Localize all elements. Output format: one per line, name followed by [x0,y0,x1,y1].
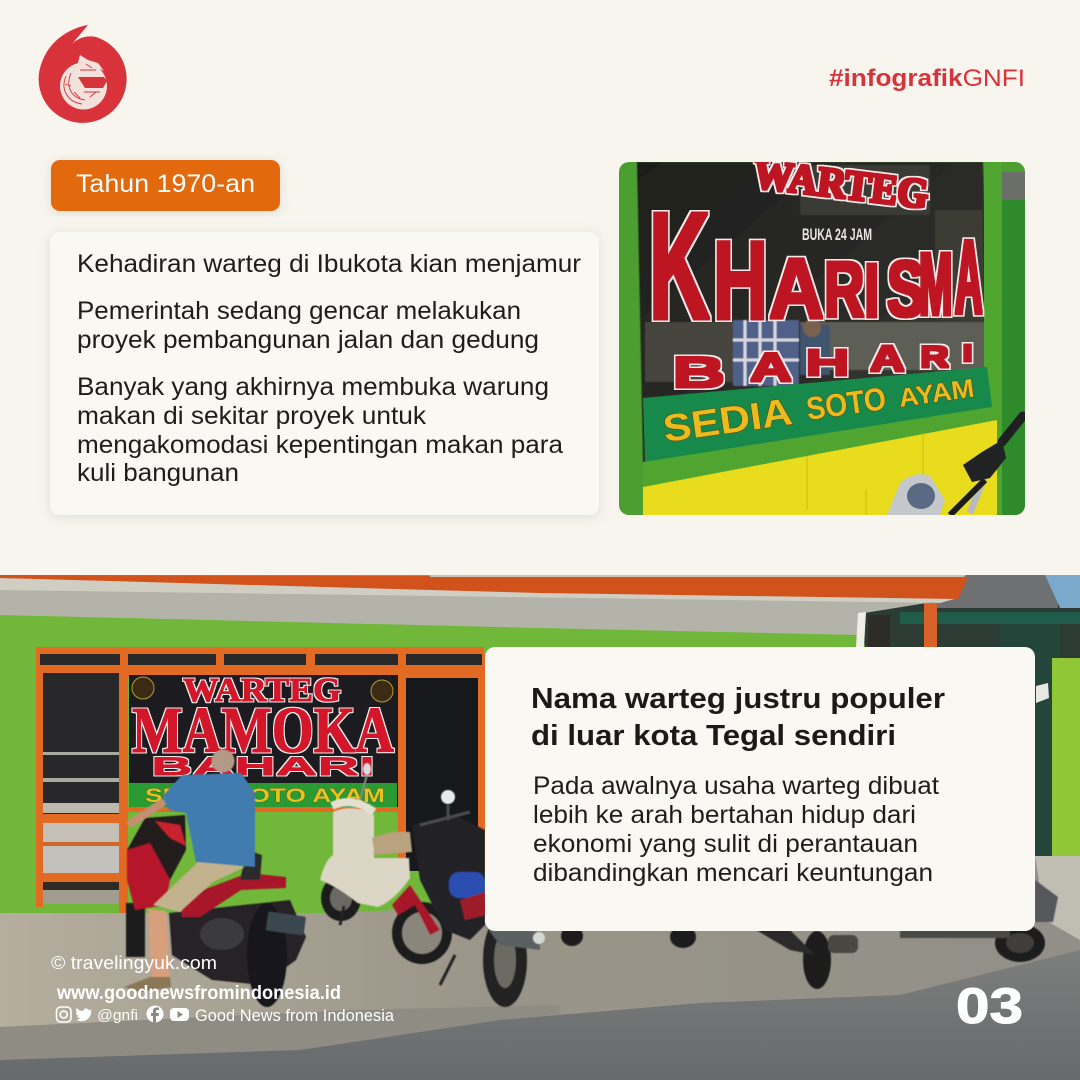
sign: BAHARI: I [962,340,973,366]
left window and cabinet [43,673,119,904]
paragraph 3 [77,373,563,487]
paragraph 3: kuli bangunan [77,459,239,487]
handle: @gnfi [97,1007,138,1024]
sign: BAHARI: A [870,339,905,379]
photo: Warteg Kharisma Bahari window [619,151,1025,515]
sign: SEDIA SOTO AYAM: SEDIA [660,391,795,451]
sign: SEDIA SOTO AYAM: SEDIA SOTO AYAM [145,786,385,807]
icon: facebook [146,1006,164,1023]
photo: Warteg Mamoka Bahari storefront [0,575,1080,1080]
panel: warteg history text [50,232,599,515]
paragraph: dibandingkan mencari keuntungan [533,859,933,887]
paragraph [533,772,939,887]
icon: instagram [56,1007,71,1022]
logo: GNFI [39,25,127,123]
white scooter [320,763,412,925]
pavement [0,856,1080,1027]
pavement edge strip [0,1005,560,1062]
sign: WARTEG: WARTEG [751,151,931,218]
orange roof edge [0,575,968,599]
motorcycle handlebar [887,416,1023,515]
sign: BAHARI: BAHARI [151,753,375,781]
sign: KHARISMA: A [955,218,982,338]
channel name: Good News from Indonesia [195,1006,395,1025]
paragraph 3: Banyak yang akhirnya membuka warung [77,373,549,401]
paragraph 2: Pemerintah sedang gencar melakukan [77,297,521,325]
sign: BAHARI: B [672,348,725,396]
sign: SEDIA SOTO AYAM: SOTO [804,380,888,427]
sign: KHARISMA [652,210,984,322]
sign badges [132,677,393,702]
lower frame [643,407,992,464]
sign board [129,675,398,807]
sign: BUKA 24 JAM: BUKA 24 JAM [802,225,872,244]
sign: BAHARI: A [750,345,792,390]
period tag: Tahun 1970-an [51,160,280,211]
sign: BAHARI [674,342,974,390]
photo credit: © travelingyuk.com [51,953,217,973]
yellow wall [643,420,997,515]
sign: MAMOKA: MAMOKA [132,694,394,767]
sign: KHARISMA: A [769,242,824,337]
sign: BAHARI: R [920,341,949,374]
door [406,678,478,871]
sign: BAHARI: H [805,342,850,383]
green wall [0,612,865,913]
paragraph 3: makan di sekitar proyek untuk [77,402,427,430]
paragraph 2: proyek pembangunan jalan dan gedung [77,326,539,354]
green soto sign band [643,367,992,462]
heading: Nama warteg justru populer [531,683,945,715]
sign: KHARISMA: S [887,243,924,333]
heading: di luar kota Tegal sendiri [531,720,896,752]
social row [56,1006,395,1025]
shop window glass [637,162,990,463]
icon: youtube [170,1008,189,1021]
soffit [0,590,929,635]
red motorcycle by door [392,790,545,1007]
page number: 03 [956,978,1023,1034]
paragraph 3: mengakomodasi kepentingan makan para [77,431,563,459]
parked motorcycles below card [561,880,1058,989]
window reflections [645,165,985,386]
sign: KHARISMA: H [713,218,768,344]
paragraph: lebih ke arah bertahan hidup dari [533,801,916,829]
sign: WARTEG: WARTEG [183,672,341,709]
sign: SEDIA SOTO AYAM [129,783,397,807]
website url: www.goodnewsfromindonesia.id [56,983,341,1004]
paragraph: ekonomi yang sulit di perantauan [533,830,918,858]
panel: warteg popular outside Tegal [485,647,1035,931]
sign: KHARISMA: M [919,234,952,334]
paragraph 2 [77,297,539,354]
sign: KHARISMA: K [649,181,710,353]
sign: KHARISMA: I [864,248,880,334]
icon: twitter [76,1008,92,1021]
sign: KHARISMA: R [824,244,864,334]
paragraph: Pada awalnya usaha warteg dibuat [533,772,939,800]
sign: SEDIA SOTO AYAM: AYAM [897,373,976,413]
right neighbouring building [860,575,1080,870]
right door section [984,162,1025,515]
period tag: Tahun 1970-an: Tahun 1970-an [76,170,255,198]
paragraph 1: Kehadiran warteg di Ibukota kian menjamur [77,250,581,278]
rider [124,750,255,992]
hashtag: infografikGNFI: #infografik GNFI [829,65,1025,92]
orange window frame [36,647,485,915]
motorcycle with rider [126,815,306,1007]
road [0,950,1080,1080]
sign: SEDIA SOTO AYAM [664,378,974,442]
heading [531,683,945,752]
